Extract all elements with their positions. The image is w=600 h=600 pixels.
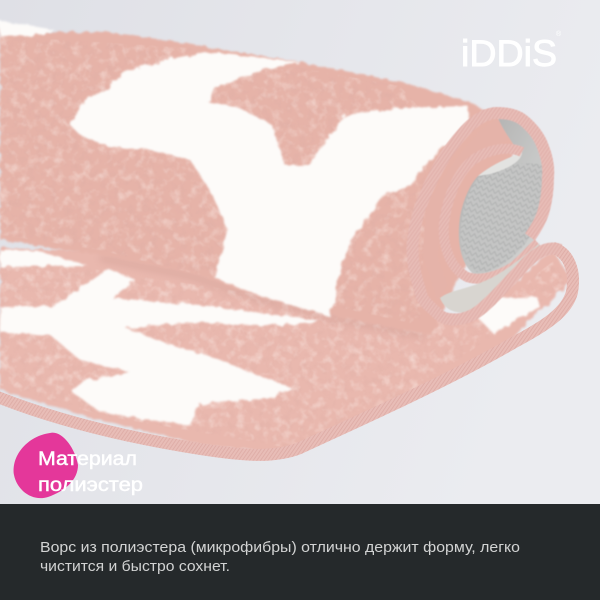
- lower backing flap: [440, 243, 540, 312]
- logo: IDDIS: ®: [556, 30, 562, 38]
- shadow under the roll: [100, 258, 425, 336]
- grey backing: [459, 118, 546, 278]
- lower mat pile highlights: [0, 255, 565, 448]
- knit backing: [461, 163, 543, 272]
- upper roll pile texture: [0, 36, 430, 325]
- heading: material: Материал: [38, 449, 137, 470]
- inner pink fold: [423, 118, 510, 300]
- heading: material: полиэстер: [38, 475, 143, 496]
- upper roll pile highlights: [0, 36, 430, 325]
- description text: [40, 540, 520, 575]
- description text: чистится и быстро сохнет.: [40, 559, 230, 575]
- heading: material: [38, 449, 143, 496]
- lower mat pile texture: [0, 255, 565, 448]
- lower mat pile: [0, 248, 572, 455]
- outer rolled edge: [412, 113, 560, 319]
- upper roll white pattern: [0, 20, 470, 316]
- lower mat bound edge: [0, 248, 573, 455]
- lower mat white pattern: [0, 250, 540, 425]
- pale backing tip: [478, 152, 522, 176]
- logo: IDDIS: iDDiS: [461, 33, 557, 74]
- footer band: [0, 504, 600, 600]
- upper roll pile: [0, 28, 520, 335]
- inner rolled edge: [444, 149, 538, 279]
- description text: Ворс из полиэстера (микрофибры) отлично держит форму, легко: [40, 540, 520, 556]
- pink blob: [14, 433, 78, 498]
- rug photo: [0, 20, 573, 455]
- roll interior: [412, 113, 560, 319]
